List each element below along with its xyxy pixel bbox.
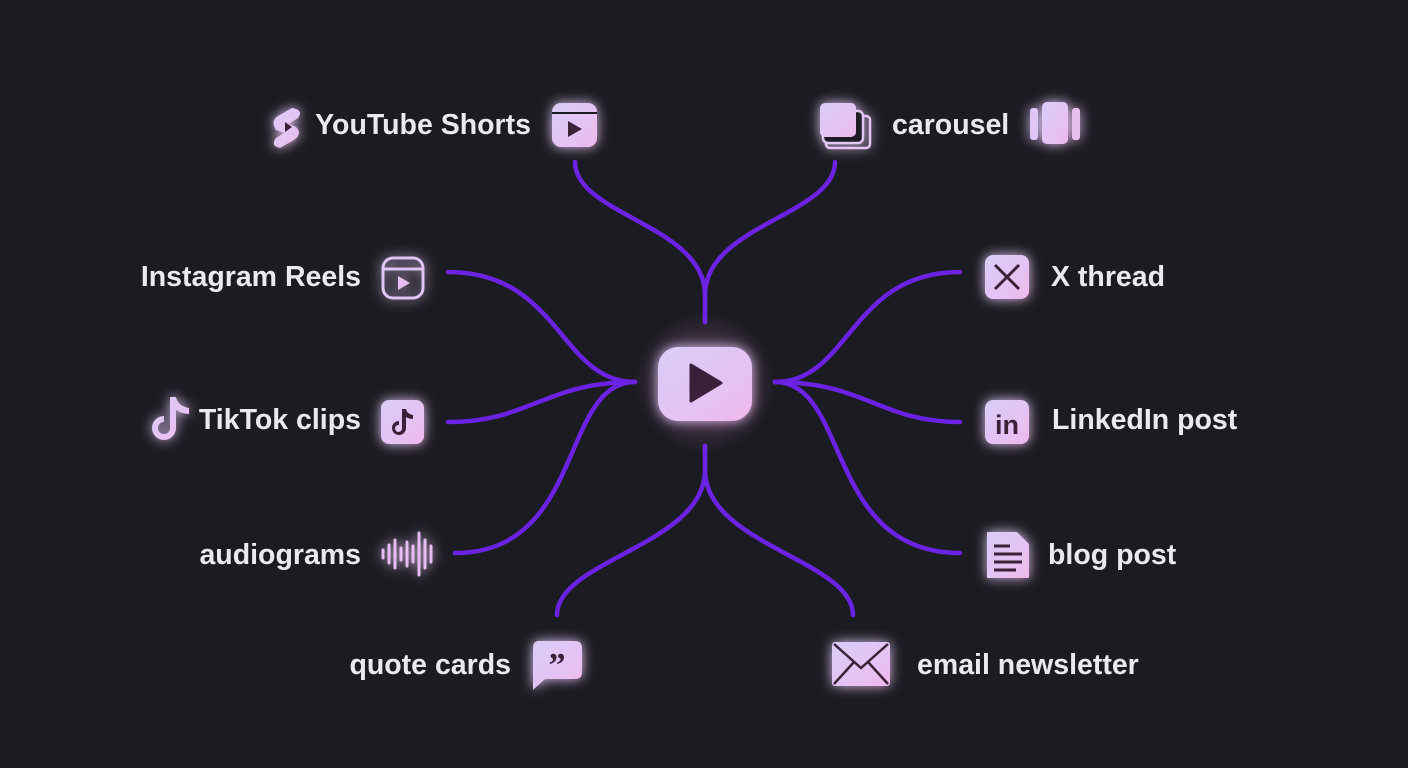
- icon: youtube shorts logo: [273, 108, 300, 148]
- label: email newsletter: email newsletter: [917, 649, 1139, 681]
- icon: instagram reels: [383, 258, 423, 298]
- icon: blog document: [987, 532, 1029, 578]
- label: blog post: blog post: [1048, 539, 1176, 571]
- label: YouTube Shorts: YouTube Shorts: [315, 109, 531, 141]
- icon: carousel slides: [1030, 102, 1080, 144]
- icon: quote bubble: ”: [548, 647, 566, 684]
- icon: shorts clapper: [552, 103, 597, 147]
- icon: tiktok logo: [152, 397, 189, 440]
- icon: linkedin: in: [995, 410, 1019, 440]
- icon: audio waveform: [383, 533, 431, 575]
- icon: x logo: [985, 255, 1029, 299]
- connector lines: [448, 162, 960, 615]
- icon: email envelope: [832, 642, 890, 686]
- label: Instagram Reels: Instagram Reels: [141, 261, 361, 293]
- label: audiograms: audiograms: [199, 539, 361, 571]
- icon: tiktok square: [381, 400, 424, 444]
- label: X thread: X thread: [1051, 261, 1165, 293]
- icon: linkedin: [985, 400, 1029, 444]
- label: TikTok clips: TikTok clips: [199, 404, 361, 436]
- icon: central play button: [635, 313, 775, 453]
- icon: quote bubble: [533, 641, 582, 690]
- label: quote cards: quote cards: [349, 649, 511, 681]
- label: LinkedIn post: LinkedIn post: [1052, 404, 1237, 436]
- icon: carousel stack: [820, 103, 870, 148]
- label: carousel: carousel: [892, 109, 1009, 141]
